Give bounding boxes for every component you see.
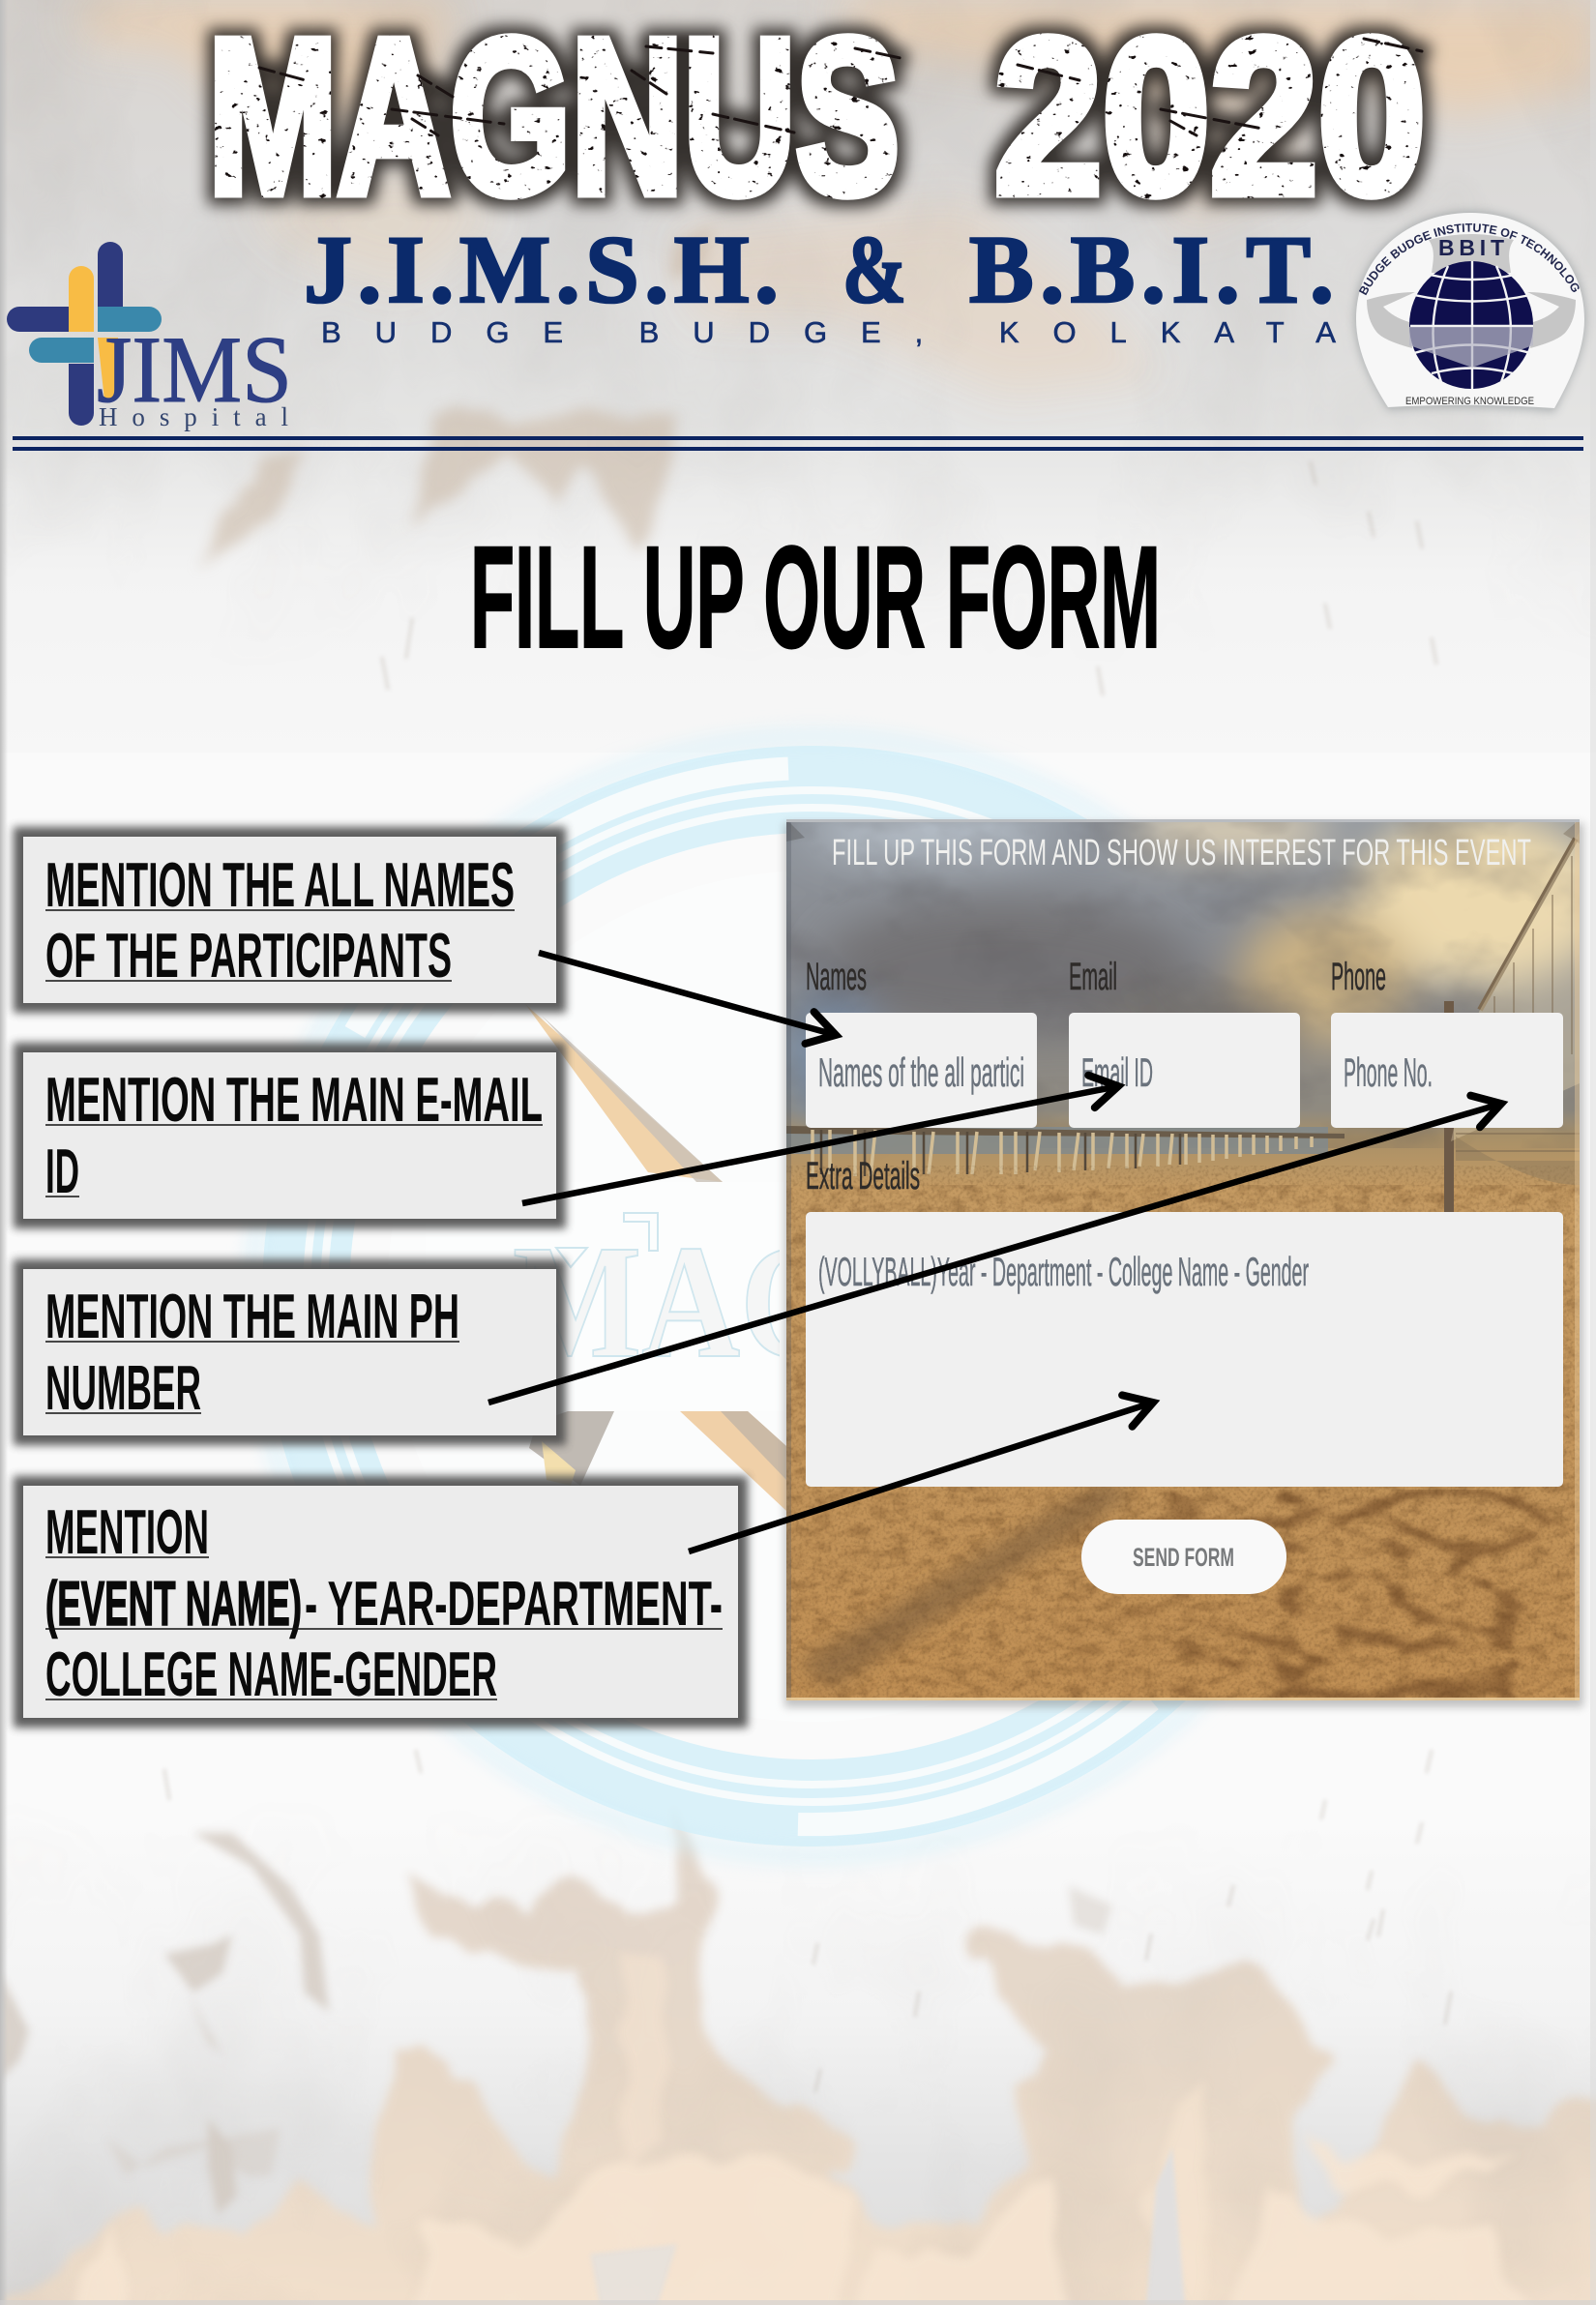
field: phone xyxy=(1331,956,1563,1128)
send button: SEND FORM xyxy=(1133,1543,1234,1572)
callout: names: OF THE PARTICIPANTS xyxy=(45,920,452,990)
form photo: beach with pier and volleyball net xyxy=(783,811,1596,1700)
header: institute names: & xyxy=(842,216,906,323)
logo: BBIT globe badge xyxy=(1350,207,1590,416)
header: location subtitle: BUDGE BUDGE, KOLKATA xyxy=(321,315,1336,349)
send button xyxy=(1081,1520,1286,1594)
header: institute names xyxy=(304,216,1334,323)
callout: email: MENTION THE MAIN E-MAIL xyxy=(45,1064,543,1135)
double header rule xyxy=(13,436,1583,451)
header title: MAGNUS 2020: MAGNUS xyxy=(208,0,900,240)
callout: phone xyxy=(14,1259,566,1445)
field: names: Names xyxy=(806,956,867,998)
header: institute names: J.I.M.S.H. xyxy=(304,216,779,323)
header: institute names: B.B.I.T. xyxy=(969,216,1334,323)
callout: extra details xyxy=(14,1476,748,1728)
background watermark: Magnus logo with rings and star: MAG xyxy=(513,1212,846,1392)
field: email: Email ID xyxy=(1081,1049,1153,1095)
callout: names: MENTION THE ALL NAMES xyxy=(45,849,515,920)
background watermark: Magnus logo with rings and star xyxy=(244,725,1203,1867)
field: extra details: Extra Details xyxy=(806,1155,920,1197)
logo: JIMS Hospital: Hospital xyxy=(99,402,288,431)
field: extra details xyxy=(806,1155,1563,1487)
arrow: names callout to names field xyxy=(539,953,836,1035)
callout: names xyxy=(14,827,566,1013)
callout: email xyxy=(14,1043,566,1228)
header title: MAGNUS 2020: 2020 xyxy=(994,0,1426,240)
callout: phone: NUMBER xyxy=(45,1352,201,1423)
callout: email: ID xyxy=(45,1136,79,1206)
callout: extra details: (EVENT NAME) xyxy=(45,1568,302,1639)
field: email: Email xyxy=(1069,956,1117,998)
callout: extra details: COLLEGE NAME-GENDER xyxy=(45,1639,497,1709)
field: email xyxy=(1069,956,1300,1128)
field: names xyxy=(806,956,1037,1128)
field: phone: Phone No. xyxy=(1344,1049,1433,1095)
callout: extra details: MENTION xyxy=(45,1496,209,1567)
logo: JIMS Hospital: JIMS xyxy=(97,317,292,423)
arrow: phone callout to phone field xyxy=(488,1104,1501,1403)
arrow: details callout to extra details field xyxy=(689,1403,1153,1551)
logo: BBIT globe badge: BBIT xyxy=(1438,235,1504,260)
field: phone: Phone xyxy=(1331,956,1386,998)
callout: phone: MENTION THE MAIN PH xyxy=(45,1281,459,1351)
panel: contact form screenshot xyxy=(783,811,1596,1707)
field: names: Names of the all partici xyxy=(818,1049,1024,1095)
logo: JIMS Hospital xyxy=(7,242,292,431)
callout: extra details: - YEAR-DEPARTMENT- xyxy=(305,1568,723,1639)
logo: BBIT globe badge: EMPOWERING KNOWLEDGE xyxy=(1405,396,1534,407)
arrow: email callout to email field xyxy=(522,1086,1118,1203)
